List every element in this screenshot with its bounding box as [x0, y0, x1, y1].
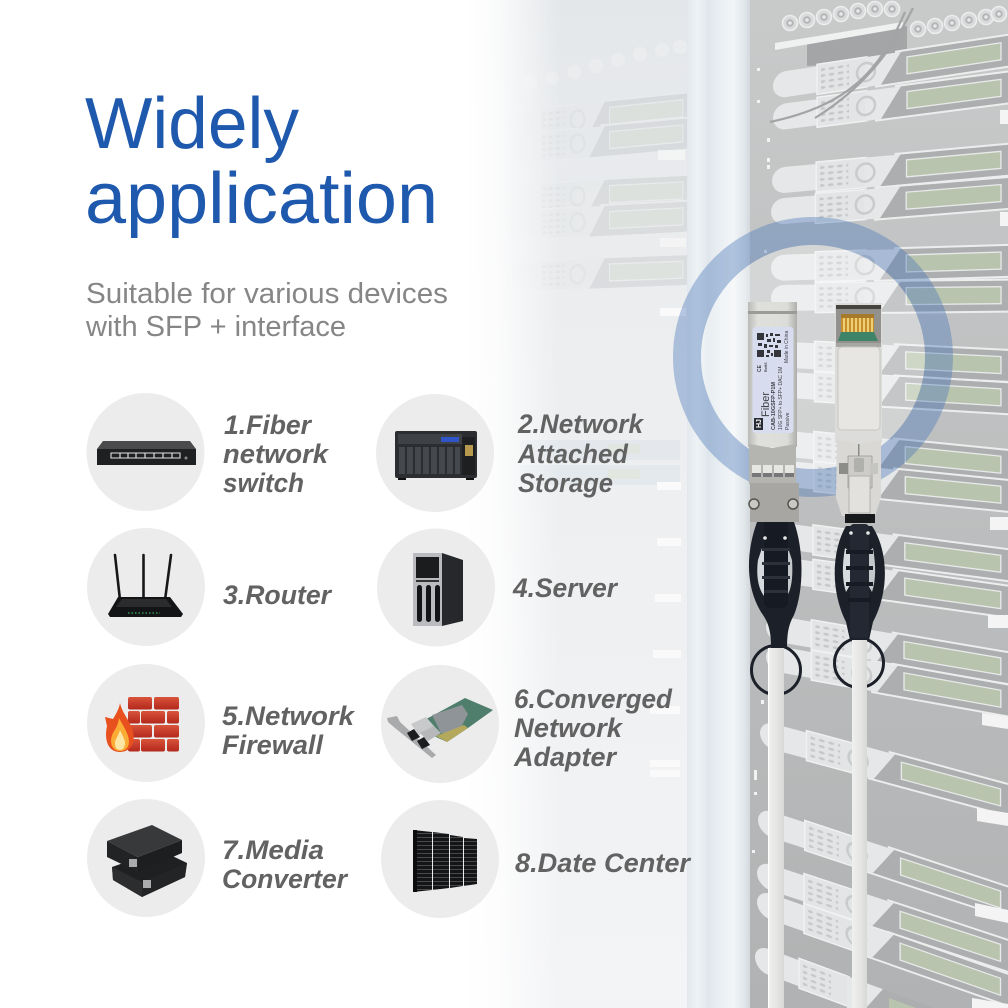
item 1: fiber network switch: [86, 393, 330, 511]
subtitle: with SFP + interface: [85, 311, 346, 343]
label: 8.Date Center: [515, 848, 691, 878]
blue highlight ring: [687, 231, 939, 483]
pull ring: [752, 646, 800, 694]
label: Storage: [518, 468, 613, 498]
label: Adapter: [513, 742, 617, 772]
icon: firewall: [105, 697, 179, 752]
rack pillar: [687, 0, 750, 1008]
label: 4.Server: [512, 573, 618, 603]
item 6: converged network adapter: [381, 665, 672, 783]
label text: [756, 331, 791, 430]
item 8: data center: [381, 800, 691, 918]
subtitle: [85, 278, 448, 343]
pull tab and boot: [749, 520, 802, 648]
label text: RoHS: [764, 362, 768, 372]
label: Attached: [517, 439, 628, 469]
item 2: network attached storage: [376, 394, 645, 512]
icon: network card: [387, 698, 493, 758]
label text: Passive: [785, 412, 791, 430]
label text: Fiber: [760, 392, 772, 417]
label: [223, 410, 330, 498]
cable: [768, 648, 784, 1008]
left rack: [470, 0, 690, 1008]
icon: server tower: [413, 553, 463, 626]
label: switch: [223, 468, 304, 498]
title: [85, 84, 438, 239]
label: [222, 835, 348, 894]
white fade on the left edge: [465, 0, 560, 1008]
icon: router: [108, 555, 183, 617]
label: 5.Network: [222, 701, 356, 731]
background photo: server racks: [465, 0, 1008, 1008]
subtitle: Suitable for various devices: [86, 278, 448, 310]
label text: HJ: [756, 419, 763, 428]
label text: CAB-10GSFP-P1M: [771, 382, 777, 430]
label: 1.Fiber: [224, 410, 312, 440]
logo block: [754, 418, 763, 430]
label text: 10G SFP+ to SFP+ DAC 1M: [778, 367, 784, 430]
cable: [852, 638, 867, 1008]
connector body: [835, 303, 882, 523]
gold contacts: [838, 314, 878, 341]
label text: CE: [757, 364, 763, 372]
label: network: [223, 439, 330, 469]
product label: [752, 327, 794, 433]
label: 3.Router: [223, 580, 332, 610]
connector body: [748, 302, 799, 522]
label: 7.Media: [222, 835, 324, 865]
label: [513, 684, 672, 772]
QR code: [757, 333, 781, 357]
label: [517, 409, 645, 498]
icon: switch: [97, 441, 196, 465]
title: Widely: [85, 84, 299, 164]
label: [222, 701, 356, 760]
label: 6.Converged: [514, 684, 672, 714]
label: 2.Network: [517, 409, 645, 439]
label: Converter: [222, 864, 348, 894]
item 7: media converter: [87, 799, 348, 917]
item 3: router: [87, 528, 332, 646]
right cable assembly: [834, 303, 885, 1008]
right rack: [750, 0, 1008, 1008]
title: application: [85, 159, 438, 239]
label text: Made in China: [784, 331, 790, 363]
item 4: server: [377, 528, 618, 646]
label: Firewall: [222, 730, 323, 760]
icon: rack row: [413, 830, 477, 892]
item 5: network firewall: [87, 664, 356, 782]
icon: NAS: [395, 431, 477, 480]
pull ring: [834, 638, 884, 688]
label: Network: [514, 713, 624, 743]
icon: media converters: [107, 825, 187, 897]
pull tab and boot: [835, 524, 885, 640]
left cable assembly: [748, 302, 802, 1008]
